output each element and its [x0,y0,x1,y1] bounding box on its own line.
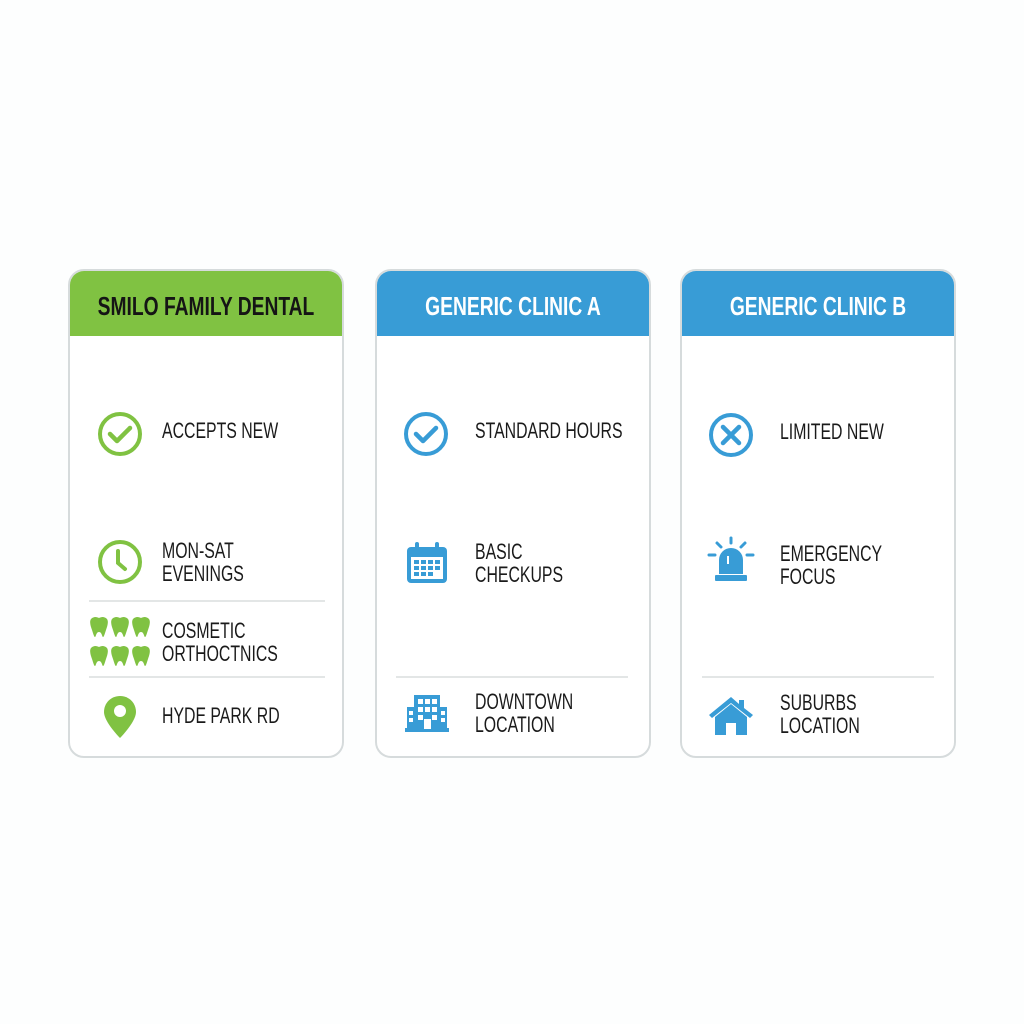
heading: Smilo Family Dental: SMILO FAMILY DENTAL [98,291,314,321]
icon: check circle green [98,412,142,456]
text: emergency focus: FOCUS [780,564,835,589]
heading: Generic Clinic B: GENERIC CLINIC B [730,291,906,321]
heading: Generic Clinic A: GENERIC CLINIC A [425,291,601,321]
icon: clock [98,540,142,584]
text: standard hours: STANDARD HOURS [475,418,623,443]
text: cosmetic orthoctnics: COSMETIC [162,618,246,643]
icon: check circle blue [404,412,448,456]
text: downtown location [475,689,573,737]
panel: Smilo Family Dental [68,269,344,758]
heading: Smilo Family Dental [70,271,342,336]
icon: teeth [90,617,150,666]
text: downtown location: LOCATION [475,712,555,737]
text: basic checkups: CHECKUPS [475,562,563,587]
text: downtown location: DOWNTOWN [475,689,573,714]
text: mon-sat evenings: MON-SAT [162,538,234,563]
text: basic checkups: BASIC [475,539,523,564]
panel: Generic Clinic A [375,269,651,758]
text: emergency focus [780,541,882,589]
text: limited new: LIMITED NEW [780,419,884,444]
heading: Generic Clinic B [682,271,954,336]
icon: building [405,695,449,732]
icon: house [709,697,753,735]
text: hyde park rd: HYDE PARK RD [162,703,280,728]
text: emergency focus: EMERGENCY [780,541,882,566]
text: suburbs location [780,690,860,738]
icon: map pin [104,696,136,738]
heading: Generic Clinic A [377,271,649,336]
text: basic checkups [475,539,563,587]
text: accepts new: ACCEPTS NEW [162,418,278,443]
text: suburbs location: SUBURBS [780,690,857,715]
text: cosmetic orthoctnics [162,618,278,666]
icon: siren [708,536,754,581]
text: mon-sat evenings: EVENINGS [162,561,244,586]
text: suburbs location: LOCATION [780,713,860,738]
icon: calendar [407,542,447,583]
panel: Generic Clinic B [680,269,956,758]
icon: x circle [709,413,753,457]
text: mon-sat evenings [162,538,244,586]
text: cosmetic orthoctnics: ORTHOCTNICS [162,641,278,666]
